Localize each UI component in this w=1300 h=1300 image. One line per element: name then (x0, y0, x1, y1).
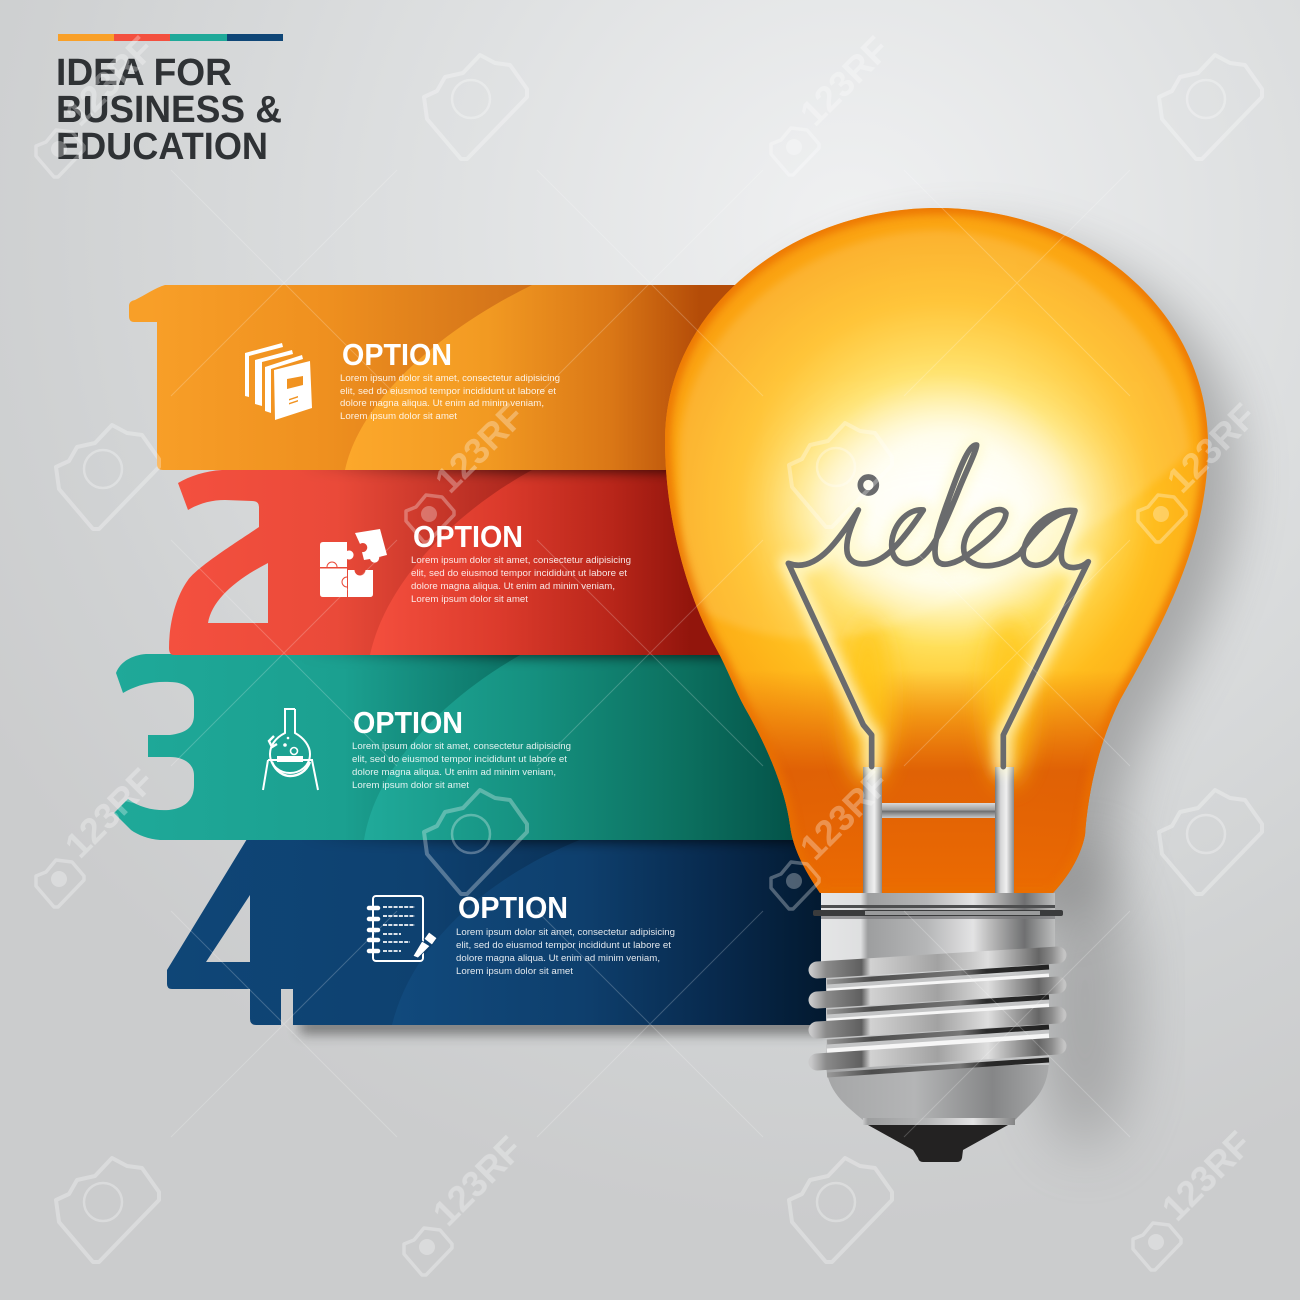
text: option 4: elit, sed do eiusmod tempor incididunt ut labore et (456, 940, 671, 951)
title: EDUCATION (56, 126, 268, 168)
heading: option 1: OPTION (342, 337, 452, 372)
text: option 4: Lorem ipsum dolor sit amet, consectetur adipisicing (456, 927, 675, 938)
text: option 3: elit, sed do eiusmod tempor incididunt ut labore et (352, 754, 567, 765)
text: option 2 (411, 555, 631, 605)
filament glow (788, 445, 1088, 767)
title: BUSINESS & (56, 89, 282, 131)
watermark: 123RF (427, 395, 532, 501)
icon: puzzle pieces (320, 529, 387, 597)
watermark: 123RF (425, 1128, 530, 1234)
base cast shadow (1035, 850, 1135, 1150)
colour bar (58, 34, 283, 41)
text: option 4: dolore magna aliqua. Ut enim ad minim veniam, (456, 953, 660, 964)
band 2: red (169, 470, 720, 655)
filament supports (863, 767, 1014, 894)
glow column (844, 615, 892, 785)
text: option 2: Lorem ipsum dolor sit amet (411, 594, 528, 605)
text: option 1: elit, sed do eiusmod tempor incididunt ut labore et (340, 386, 556, 397)
bulb cast shadow (695, 233, 1238, 918)
text: option 1 (340, 373, 560, 422)
watermark: 123RF (1159, 395, 1264, 501)
glass highlight (680, 230, 1190, 639)
watermark: 123RF (1154, 1123, 1259, 1229)
heading: option 4: OPTION (458, 890, 568, 925)
heading: option 3: OPTION (353, 705, 463, 740)
heading: option 2: OPTION (413, 519, 523, 554)
text: option 2: Lorem ipsum dolor sit amet, consectetur adipisicing (411, 555, 631, 566)
text: option 4 (456, 927, 675, 977)
band 4: navy (167, 828, 840, 1025)
lamp screw base (813, 893, 1063, 1162)
title (56, 52, 282, 168)
text: option 1: dolore magna aliqua. Ut enim ad minim veniam, (340, 398, 544, 409)
icon: flask on stand (263, 709, 318, 790)
band 3: teal (114, 654, 793, 840)
watermark: 123RF (57, 28, 162, 134)
text: option 2: elit, sed do eiusmod tempor incididunt ut labore et (411, 568, 627, 579)
title: IDEA FOR (56, 52, 232, 94)
filament word: idea wire (788, 445, 1088, 767)
band drop shadow (300, 1018, 830, 1034)
central glow (795, 420, 1095, 590)
text: option 3: dolore magna aliqua. Ut enim ad minim veniam, (352, 767, 556, 778)
text: option 3: Lorem ipsum dolor sit amet, consectetur adipisicing (352, 741, 571, 752)
text: option 1: Lorem ipsum dolor sit amet (340, 411, 457, 422)
band 1: orange (129, 285, 735, 470)
lamp tip (868, 1125, 1008, 1162)
watermark: 123RF (792, 28, 897, 134)
watermark: 123RF (792, 762, 897, 868)
text: option 3: Lorem ipsum dolor sit amet (352, 780, 469, 791)
text: option 1: Lorem ipsum dolor sit amet, consectetur adipisicing (340, 373, 560, 384)
light bulb glass (665, 208, 1208, 900)
watermark: 123RF (57, 760, 162, 866)
text: option 2: dolore magna aliqua. Ut enim ad minim veniam, (411, 581, 615, 592)
icon: stack of books (245, 343, 312, 420)
icon: notebook and pen (369, 896, 437, 961)
text: option 3 (352, 741, 571, 791)
text: option 4: Lorem ipsum dolor sit amet (456, 966, 573, 977)
